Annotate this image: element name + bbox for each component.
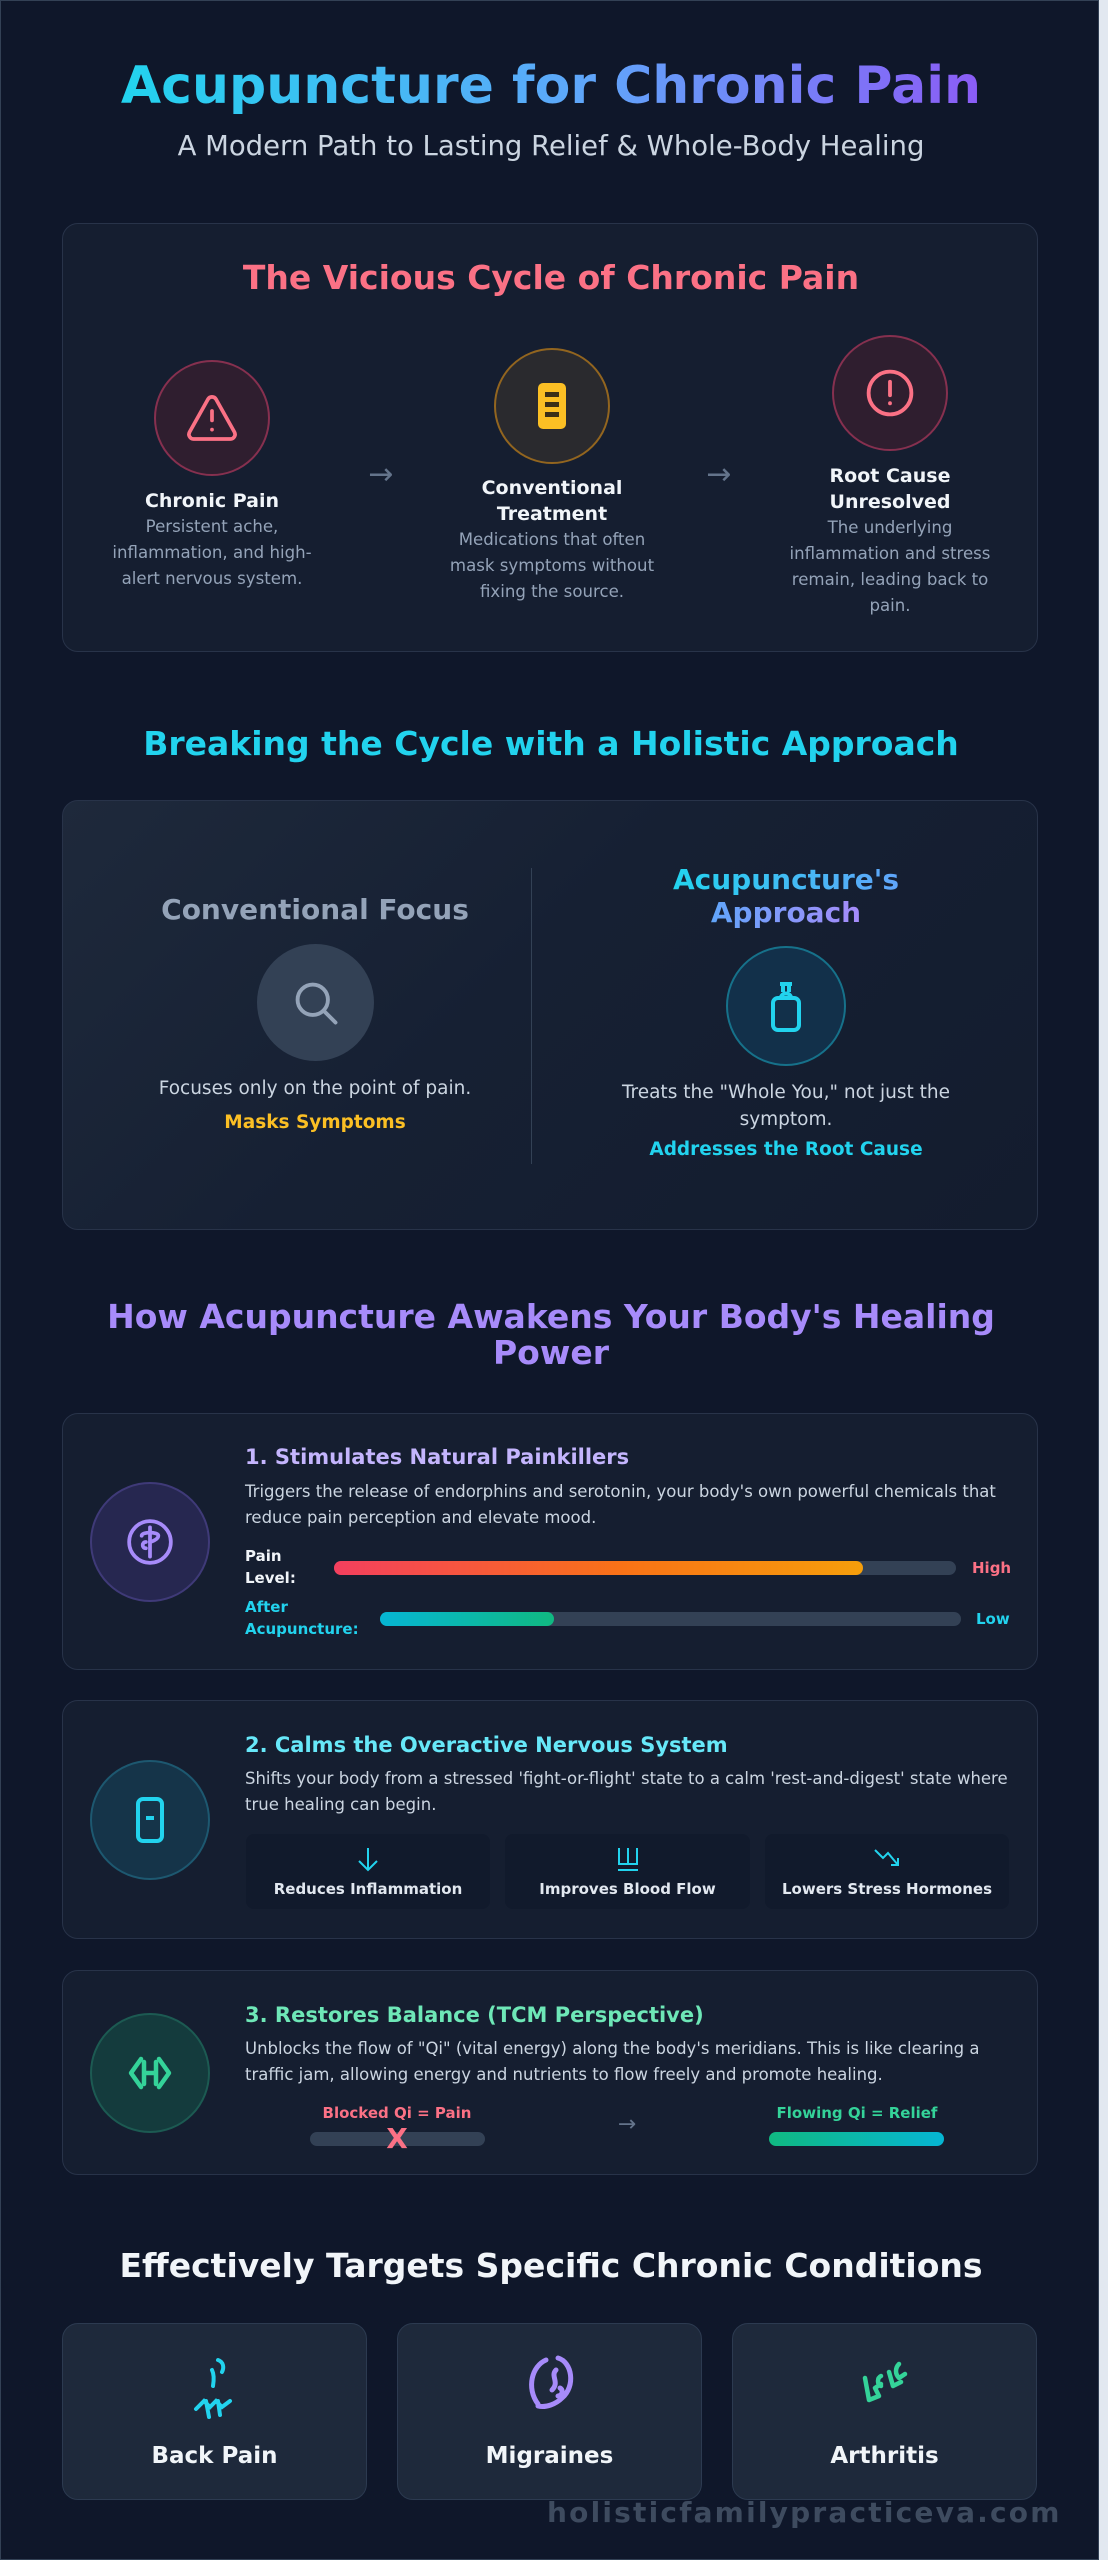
text: conventional treatment — [450, 477, 654, 601]
label: pain level: Level: — [245, 1569, 296, 1587]
text: chronic pain: Persistent ache, inflammation, and high-alert nervous system. — [112, 517, 312, 588]
title: card 2: 2. Calms the Overactive Nervous System — [245, 1733, 728, 1757]
title: card 3: 3. Restores Balance (TCM Perspective) — [245, 2003, 704, 2027]
heading: how acupuncture awakens — [107, 1297, 995, 1372]
text: treats whole you: Treats the "Whole You," not just the symptom. — [622, 1082, 950, 1130]
diagram: blocked qi: X — [386, 2122, 408, 2155]
bar: pain high — [334, 1561, 956, 1575]
card: arthritis — [732, 2323, 1037, 2500]
text: card 2: Shifts your body from a stressed 'fight-or-flight' state to a calm 'rest-and-digest' state where true healing can begin. — [245, 1769, 1008, 1814]
arrow 1: → — [368, 457, 394, 492]
heading: targets conditions: Effectively Targets Specific Chronic Conditions — [119, 2246, 983, 2285]
column: conventional focus — [159, 893, 471, 1133]
heading: breaking the cycle: Breaking the Cycle with a Holistic Approach — [143, 724, 959, 763]
arrow: qi: → — [618, 2112, 636, 2137]
box: blood flow — [505, 1834, 750, 1909]
label: masks symptoms: Masks Symptoms — [224, 1112, 406, 1133]
text: root cause: Root Cause — [830, 465, 950, 487]
label: addresses root cause: Addresses the Root Cause — [649, 1139, 923, 1160]
label: after acupuncture: Acupuncture: — [245, 1620, 359, 1638]
icon: back pain — [194, 2358, 232, 2419]
box: reduces inflammation: Reduces Inflammation — [274, 1880, 462, 1898]
text: chronic pain: Chronic Pain — [145, 490, 279, 512]
heading: how acupuncture awakens: How Acupuncture Awakens Your Body's Healing — [107, 1297, 995, 1336]
text: conventional treatment: Treatment — [497, 503, 607, 525]
diagram: blocked qi: Blocked Qi = Pain — [323, 2104, 471, 2122]
divider — [531, 868, 532, 1164]
card: migraines — [397, 2323, 702, 2500]
box: stress hormones — [765, 1834, 1009, 1909]
diagram: blocked qi — [310, 2104, 485, 2155]
panel: comparison — [62, 800, 1038, 1230]
value: high: High — [972, 1559, 1011, 1577]
card: nervous system — [62, 1700, 1038, 1939]
heading: conventional focus: Conventional Focus — [161, 893, 469, 926]
box: stress hormones: Lowers Stress Hormones — [782, 1880, 992, 1898]
icon: chronic pain warning — [154, 360, 270, 476]
card: migraines: Migraines — [486, 2443, 613, 2469]
arrow 2: → — [706, 457, 732, 492]
heading: acupuncture approach — [673, 863, 899, 929]
icon: magnifier — [257, 944, 374, 1061]
text: focuses: Focuses only on the point of pain. — [159, 1078, 471, 1099]
chart: pain level bars — [245, 1547, 1011, 1638]
text: root cause: Unresolved — [830, 491, 950, 513]
card: back pain — [62, 2323, 367, 2500]
diagram: flowing qi — [769, 2104, 944, 2146]
box: reduces inflammation — [246, 1834, 490, 1909]
text: root cause: The underlying inflammation and stress remain, leading back to pain. — [790, 518, 990, 615]
icon: arthritis — [862, 2362, 908, 2402]
icon: root cause — [832, 335, 948, 451]
icon: balance — [90, 2013, 210, 2133]
text: root cause — [790, 465, 990, 615]
icon: nervous system — [90, 1760, 210, 1880]
bar: pain low — [380, 1612, 961, 1626]
heading: how acupuncture awakens: Power — [493, 1333, 609, 1372]
card: natural painkillers — [62, 1413, 1038, 1670]
label: after acupuncture — [245, 1598, 359, 1638]
watermark: holisticfamilypracticeva.com — [547, 2496, 1062, 2529]
text: card 1: Triggers the release of endorphins and serotonin, your body's own powerful chemicals that reduce pain perception and elevate mood. — [245, 1482, 996, 1526]
icon: trend down — [874, 1849, 899, 1866]
text: card 3: Unblocks the flow of "Qi" (vital energy) along the body's meridians. This is like clearing a traffic jam, allowing energy and nutrients to flow freely and promote healing. — [245, 2039, 980, 2084]
icon: migraines — [529, 2356, 574, 2409]
card: arthritis: Arthritis — [830, 2443, 939, 2469]
icon: conventional treatment — [494, 348, 610, 464]
heading: vicious cycle: The Vicious Cycle of Chronic Pain — [243, 258, 859, 297]
title: Acupuncture for Chronic Pain — [121, 56, 981, 116]
heading: acupuncture approach: Acupuncture's — [673, 863, 899, 896]
subtitle: A Modern Path to Lasting Relief & Whole-Body Healing — [178, 130, 924, 162]
box: blood flow: Improves Blood Flow — [539, 1880, 716, 1898]
diagram: flowing qi: Flowing Qi = Relief — [777, 2104, 937, 2122]
column: acupuncture approach — [622, 863, 950, 1160]
icon: painkillers — [90, 1482, 210, 1602]
card: back pain: Back Pain — [151, 2443, 278, 2469]
icon: flow — [618, 1848, 638, 1871]
panel: vicious cycle — [62, 223, 1038, 652]
label: pain level: Pain — [245, 1547, 282, 1565]
value: low: Low — [976, 1610, 1010, 1628]
label: after acupuncture: After — [245, 1598, 288, 1616]
title: card 1: 1. Stimulates Natural Painkillers — [245, 1445, 629, 1469]
text: conventional treatment: Medications that often mask symptoms without fixing the source. — [450, 530, 654, 601]
text: conventional treatment: Conventional — [482, 477, 622, 499]
icon: acupuncture — [726, 946, 846, 1066]
label: pain level — [245, 1547, 296, 1587]
card: restores balance — [62, 1970, 1038, 2175]
heading: acupuncture approach: Approach — [711, 896, 861, 929]
icon: arrow down — [358, 1848, 378, 1872]
